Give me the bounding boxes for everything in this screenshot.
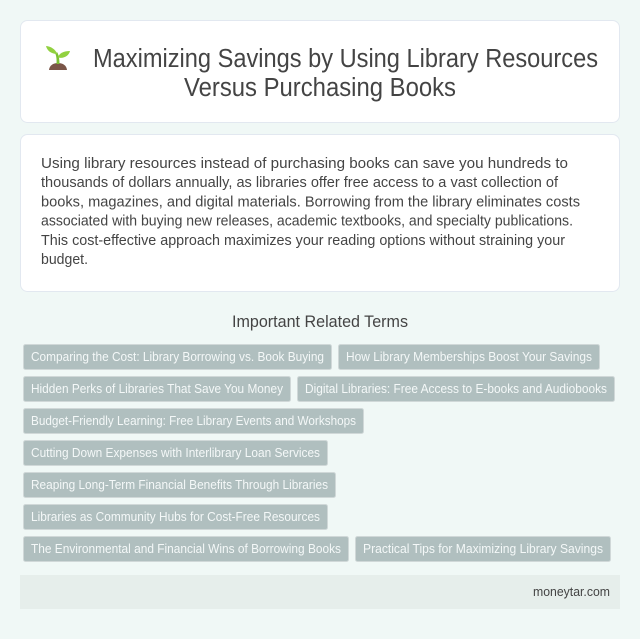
chip: Hidden Perks of Libraries That Save You Money [31, 382, 284, 396]
chip [24, 344, 332, 370]
title [93, 45, 598, 102]
related terms heading: Important Related Terms [232, 313, 408, 331]
chip: Reaping Long-Term Financial Benefits Through Libraries [31, 478, 328, 492]
summary text: budget. [41, 251, 88, 268]
title: Maximizing Savings by Using Library Resources [93, 45, 598, 73]
summary text: This cost-effective approach maximizes your reading options without straining your [41, 232, 565, 249]
chip [24, 408, 364, 434]
summary text: thousands of dollars annually, as libraries offer free access to a vast collection of [41, 174, 559, 191]
header panel [20, 20, 620, 122]
chip [24, 440, 328, 466]
summary text: Using library resources instead of purchasing books can save you hundreds to [41, 155, 568, 172]
chip [24, 536, 348, 562]
summary text [41, 155, 580, 268]
chip: Comparing the Cost: Library Borrowing vs. Book Buying [31, 350, 324, 364]
chip: Budget-Friendly Learning: Free Library Events and Workshops [31, 414, 356, 428]
chip: Cutting Down Expenses with Interlibrary Loan Services [31, 446, 320, 460]
summary panel [20, 134, 620, 292]
footer bar [20, 575, 620, 609]
chip [24, 376, 290, 402]
title: Versus Purchasing Books [184, 74, 456, 102]
summary text: books, magazines, and digital materials. Borrowing from the library eliminates costs [41, 193, 580, 210]
chip [298, 376, 614, 402]
chip: Libraries as Community Hubs for Cost-Free Resources [31, 510, 320, 524]
chip [338, 344, 600, 370]
chip: Digital Libraries: Free Access to E-books and Audiobooks [305, 382, 607, 396]
icon: seedling [46, 46, 70, 70]
footer source: moneytar.com [533, 585, 610, 599]
chip: Practical Tips for Maximizing Library Savings [363, 542, 603, 556]
chip [24, 504, 328, 530]
chip: The Environmental and Financial Wins of Borrowing Books [31, 542, 341, 556]
chip [24, 472, 336, 498]
chip [356, 536, 610, 562]
summary text: associated with buying new releases, academic textbooks, and specialty publications. [41, 213, 573, 230]
chip: How Library Memberships Boost Your Savings [346, 350, 592, 364]
related terms chips [24, 344, 614, 562]
